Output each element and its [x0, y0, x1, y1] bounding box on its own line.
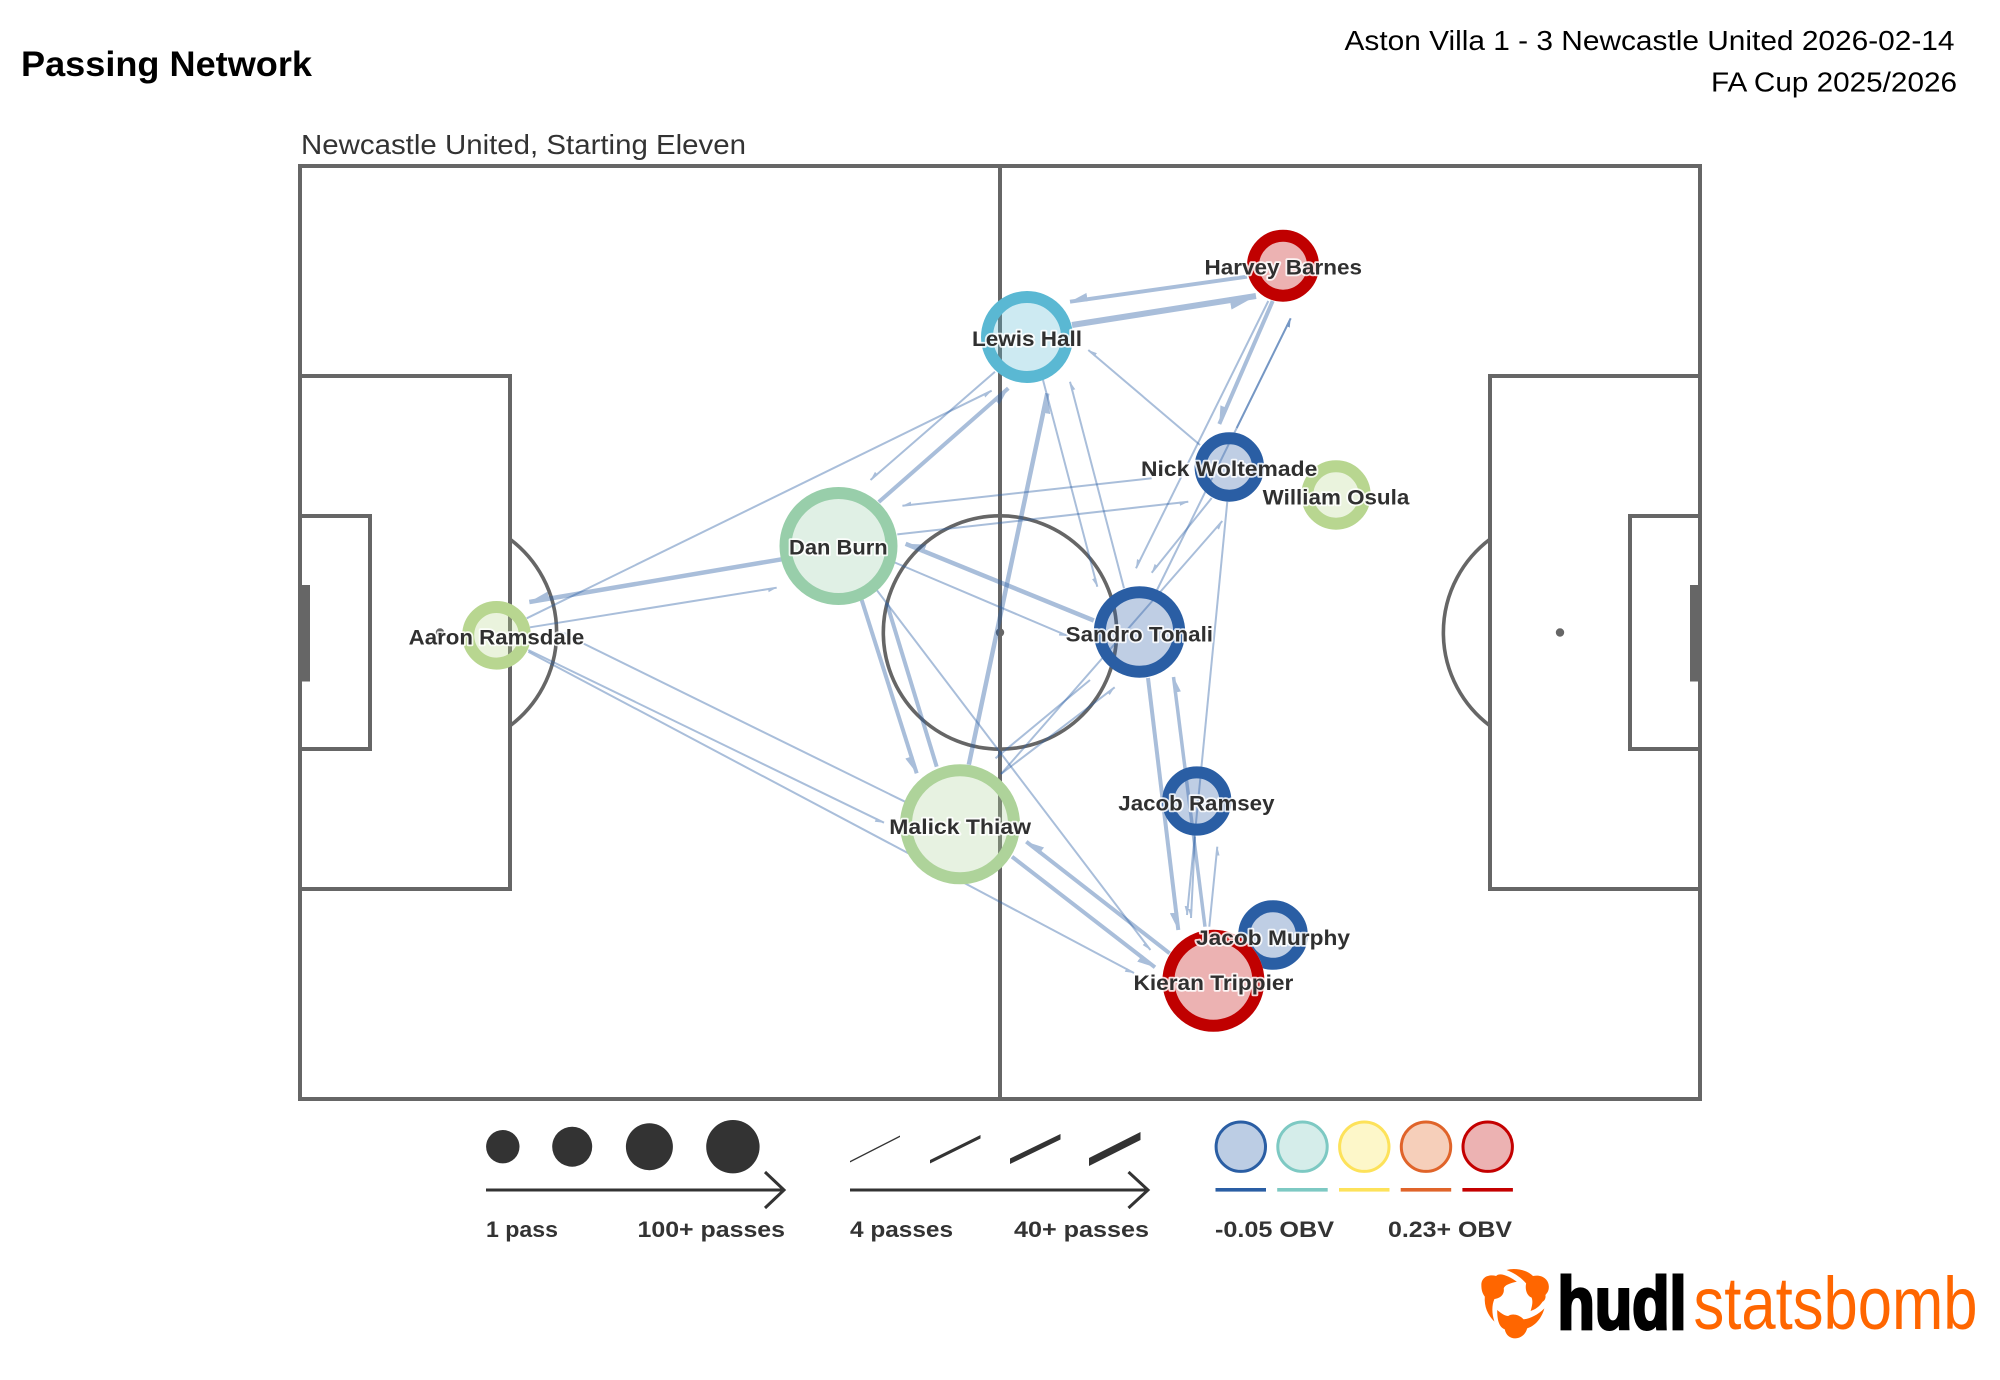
arrow: Ramsdale to Thiaw: [528, 650, 884, 823]
legend: node size by passes: [486, 1120, 785, 1242]
arrow: Burn to Tonali: [895, 562, 1068, 636]
match info: FA Cup 2025/2026: [1711, 66, 1957, 98]
legend: OBV colour scale: 0.23+ OBV: [1388, 1217, 1512, 1242]
arrow: Burn to Trippier: [877, 590, 1150, 950]
football pitch: [300, 166, 1700, 1099]
node: Malick Thiaw: [906, 770, 1014, 878]
arrow: Hall to Barnes: [1072, 296, 1256, 325]
logo: hudl statsbomb: [1481, 1262, 1978, 1345]
node: Sandro Tonali: [1100, 592, 1179, 672]
node: Lewis Hall: [987, 297, 1067, 377]
arrow: Burn to Hall: [879, 388, 1008, 502]
arrow: Woltemade to Burn: [902, 478, 1152, 506]
player nodes: [468, 236, 1365, 1032]
arrow: Barnes to Hall: [1070, 277, 1247, 302]
arrow: Trippier to Ramsey: [1209, 847, 1217, 927]
arrow: Tonali to Trippier: [1148, 678, 1178, 930]
node: Jacob Ramsey: [1168, 772, 1225, 830]
logo icon: [1481, 1269, 1549, 1338]
arrow: Barnes to Woltemade: [1219, 301, 1273, 424]
arrow: Thiaw to Burn: [887, 603, 937, 767]
legend: line width by passes: 40+ passes: [1014, 1217, 1149, 1242]
node: Kieran Trippier: [1162, 930, 1264, 1032]
label: Jacob Murphy: Jacob Murphy: [1196, 926, 1350, 950]
arrow: Thiaw to Trippier: [1012, 857, 1155, 967]
arrow: Hall to Tonali: [1043, 380, 1097, 587]
legend: OBV colour scale: [1215, 1122, 1513, 1242]
title: Passing Network: [21, 45, 313, 84]
arrow: Trippier to Tonali: [1174, 677, 1205, 927]
legend: line width by passes: 4 passes: [850, 1217, 953, 1242]
arrow: Tonali to Thiaw: [996, 680, 1090, 758]
arrow: Burn to Woltemade: [897, 502, 1188, 534]
label: Nick Woltemade: Nick Woltemade: [1141, 457, 1317, 481]
label: Lewis Hall: Lewis Hall: [972, 327, 1082, 351]
node: William Osula: [1307, 466, 1365, 524]
node: Aaron Ramsdale: [468, 607, 525, 664]
arrow: Hall to Burn: [870, 372, 995, 480]
label: Kieran Trippier: Kieran Trippier: [1134, 971, 1294, 995]
arrow: Thiaw to Woltemade: [1001, 521, 1222, 774]
label: Aaron Ramsdale: Aaron Ramsdale: [409, 625, 584, 649]
node: Jacob Murphy: [1244, 906, 1302, 964]
arrow: Barnes to Tonali: [1136, 301, 1268, 568]
arrow: Burn to Thiaw: [862, 600, 917, 773]
arrow: Thiaw to Tonali: [1001, 687, 1115, 774]
arrow: Woltemade to Hall: [1088, 350, 1200, 445]
label: Sandro Tonali: Sandro Tonali: [1066, 622, 1213, 646]
arrow: Tonali to Hall: [1070, 382, 1124, 588]
legend: node size by passes: 100+ passes: [638, 1217, 785, 1242]
node: Nick Woltemade: [1201, 438, 1258, 496]
label: William Osula: William Osula: [1263, 486, 1410, 510]
passing arrows: [527, 277, 1291, 973]
logo wordmark: hudl: hudl: [1558, 1262, 1686, 1345]
pitch subtitle: Newcastle United, Starting Eleven: [301, 129, 746, 160]
label: Malick Thiaw: Malick Thiaw: [889, 815, 1031, 839]
arrow: Ramsey to Trippier: [1191, 837, 1195, 918]
legend: line width by passes: [850, 1132, 1149, 1242]
match info: Aston Villa 1 - 3 Newcastle United 2026-02-14: [1344, 25, 1954, 56]
arrow: Tonali to Burn: [906, 544, 1094, 620]
label: Jacob Ramsey: Jacob Ramsey: [1118, 792, 1275, 816]
arrow: Woltemade to Trippier: [1187, 502, 1227, 915]
arrow: Thiaw to Hall: [969, 393, 1047, 765]
arrow: Thiaw to Ramsdale: [560, 632, 905, 802]
arrow: Trippier to Thiaw: [1026, 842, 1170, 953]
node: Harvey Barnes: [1253, 236, 1313, 296]
label: Dan Burn: Dan Burn: [789, 535, 888, 559]
match info: [1344, 25, 1957, 98]
player labels: [409, 256, 1410, 995]
legend: node size by passes: 1 pass: [486, 1217, 558, 1242]
label: Harvey Barnes: Harvey Barnes: [1204, 256, 1362, 280]
arrow: Tonali to Barnes: [1157, 318, 1291, 590]
node: Dan Burn: [786, 493, 892, 599]
arrow: Ramsdale to Burn: [530, 588, 777, 627]
arrow: Burn to Ramsdale: [529, 559, 782, 602]
arrow: Woltemade to Tonali: [1152, 498, 1212, 573]
legend: OBV colour scale: -0.05 OBV: [1215, 1217, 1334, 1242]
arrow: Woltemade to Barnes: [1237, 318, 1291, 428]
arrow: Ramsdale to Trippier: [528, 652, 1134, 973]
arrow: Ramsdale to Hall: [527, 391, 992, 618]
